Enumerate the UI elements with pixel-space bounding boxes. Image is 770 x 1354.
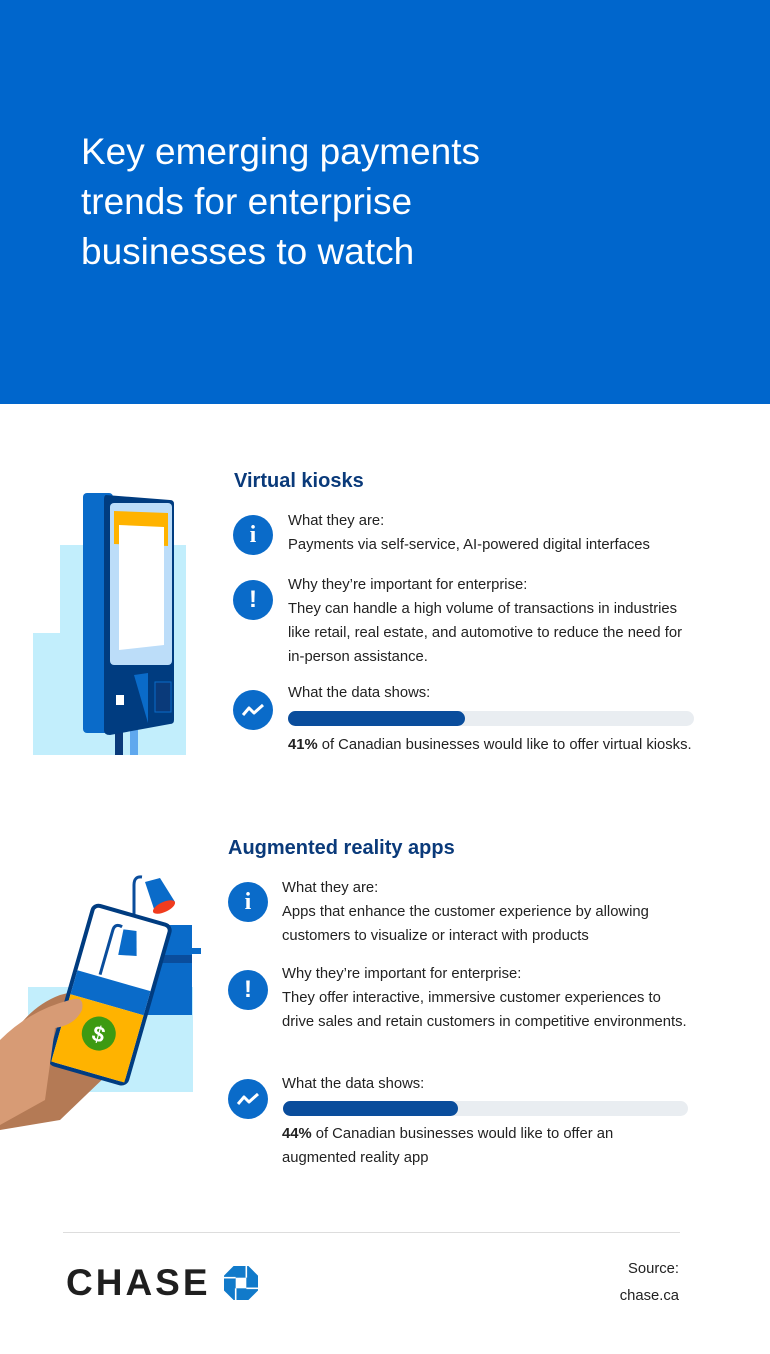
title [81,131,480,272]
text: importance: Why they’re important for enterprise: [288,577,527,593]
title: businesses to watch [81,231,414,272]
stat text [282,1126,613,1166]
icon: trend [228,1079,268,1119]
text: importance [288,577,682,665]
section: virtual kiosks [233,470,694,753]
icon: chase octagon [224,1266,258,1300]
text: what they are: What they are: [288,513,384,529]
illustration: AR phone: $ [89,1020,108,1048]
source: chase.ca [620,1288,679,1304]
heading: Virtual kiosks [234,470,364,492]
header [0,0,770,404]
source [620,1261,679,1304]
text: importance: drive sales and retain customers in competitive environments. [282,1014,687,1030]
text: data label: What the data shows: [288,685,430,701]
text: importance: in-person assistance. [288,649,428,665]
text: importance: They offer interactive, immersive customer experiences to [282,990,661,1006]
text: data label: What the data shows: [282,1076,424,1092]
text: importance: They can handle a high volume of transactions in industries [288,601,677,617]
bar chart: 44% [283,1101,688,1116]
text: what they are: Payments via self-service, AI-powered digital interfaces [288,537,650,553]
icon: exclamation: ! [249,586,257,613]
icon: info: i [250,522,256,548]
bar chart: 41% [288,711,694,726]
icon: info [228,882,268,922]
text: what they are: customers to visualize or interact with products [282,928,589,944]
text: what they are: What they are: [282,880,378,896]
text: importance: like retail, real estate, and automotive to reduce the need for [288,625,682,641]
text: what they are [282,880,649,944]
heading: Augmented reality apps [228,837,455,859]
illustration: kiosk [33,493,186,755]
stat text: augmented reality app [282,1150,428,1166]
icon: info [233,515,273,555]
stat text: 44% of Canadian businesses would like to offer an [282,1126,613,1142]
icon: exclamation: ! [244,976,252,1003]
icon: exclamation [228,970,268,1010]
logo: Chase: CHASE [66,1262,211,1303]
text: what they are: Apps that enhance the customer experience by allowing [282,904,649,920]
title: trends for enterprise [81,181,412,222]
section: augmented reality apps [228,837,688,1166]
icon: trend [233,690,273,730]
icon: info: i [245,888,251,914]
text: importance [282,966,687,1030]
stat text: 41% of Canadian businesses would like to offer virtual kiosks. [288,737,692,753]
icon: exclamation [233,580,273,620]
text: what they are [288,513,650,553]
title: Key emerging payments [81,131,480,172]
source: Source: [628,1261,679,1277]
text: importance: Why they’re important for enterprise: [282,966,521,982]
illustration: AR phone [0,875,201,1130]
